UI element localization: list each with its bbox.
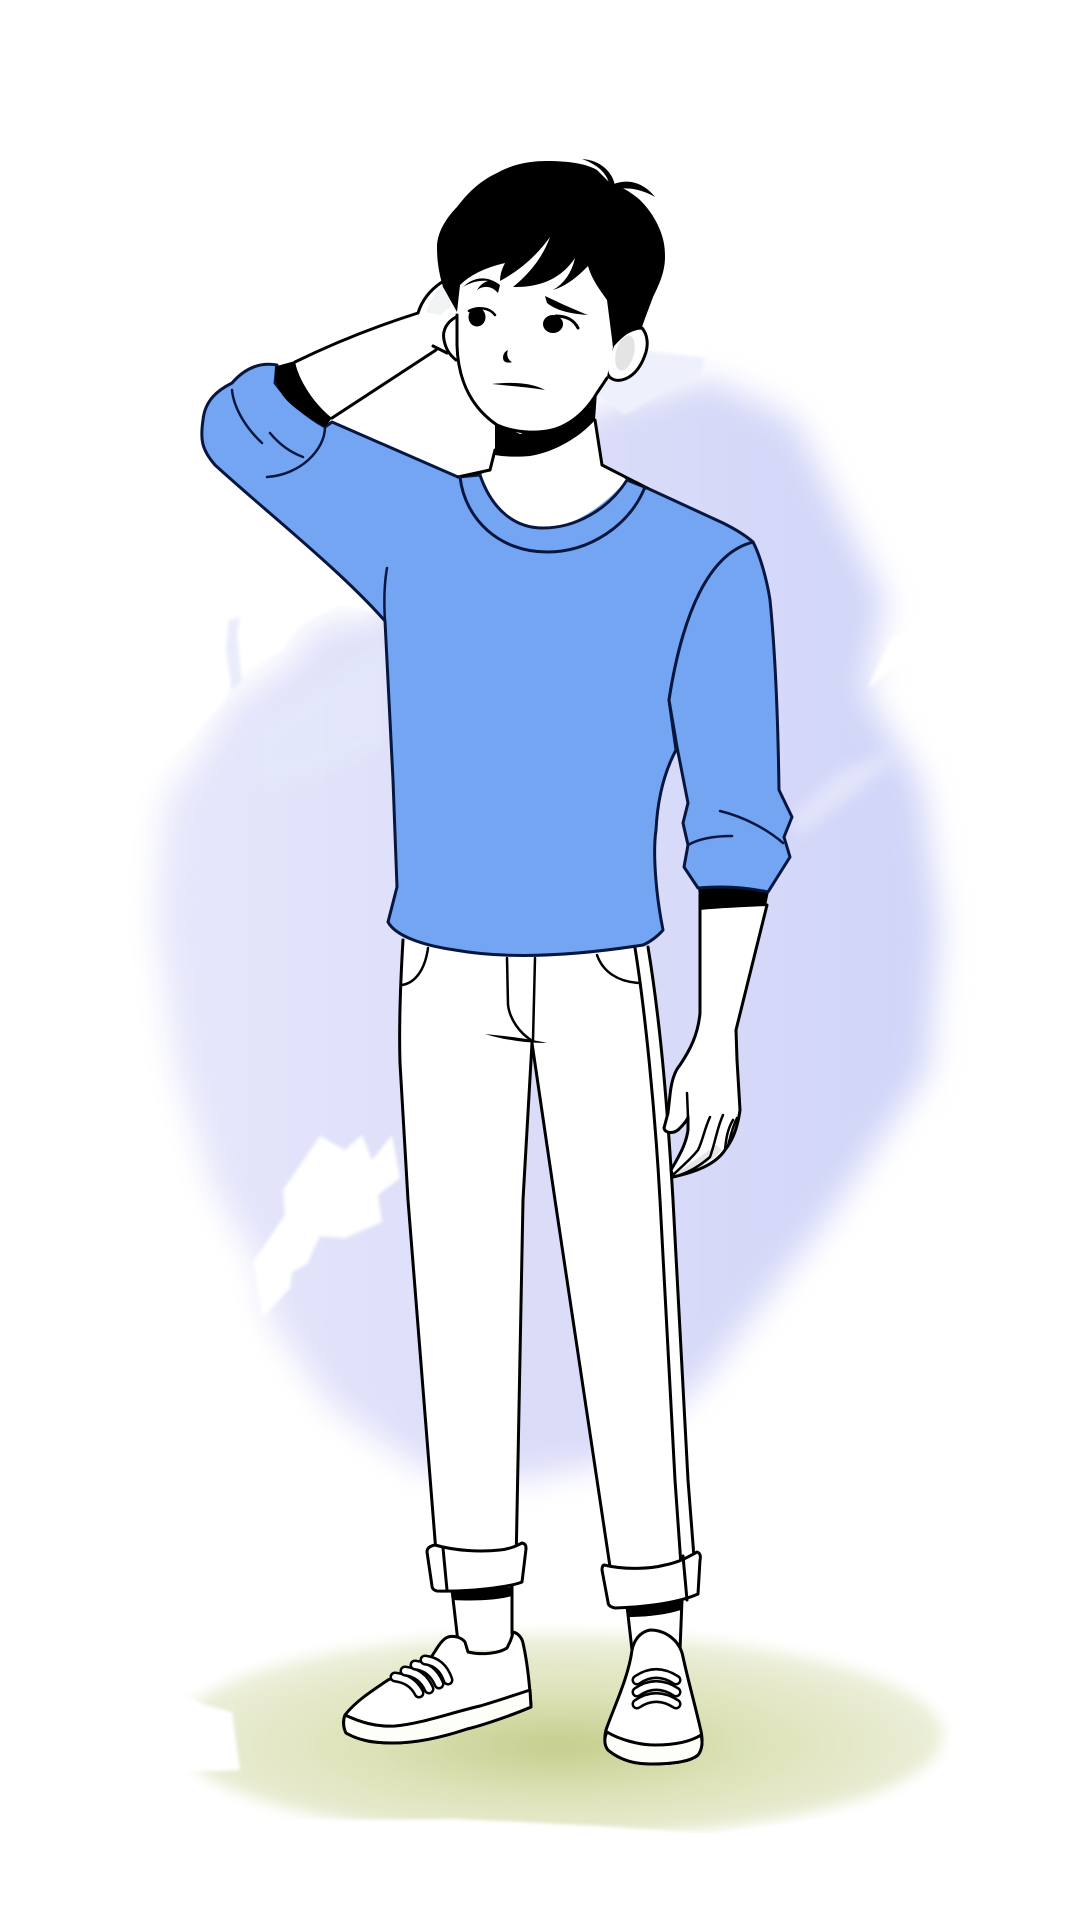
right shoe [605,1630,702,1764]
side stripe [635,948,681,1565]
left ear [444,317,456,360]
laces [395,1660,448,1693]
nose [503,350,512,363]
right sock [627,1600,682,1650]
right cuff [602,1552,700,1608]
shirt: body and raised sleeve [202,364,753,955]
background: lavender watercolor blob [120,350,960,1480]
right sleeve folds [688,811,783,845]
right ear [607,328,647,380]
left cuff [427,1543,526,1591]
face [457,250,613,432]
background: olive ground shadow [140,1633,980,1900]
collar [460,475,645,552]
raised arm and hand [295,282,460,418]
hair [437,159,665,347]
hanging forearm and hand [664,895,767,1177]
left trouser leg and right trouser leg [400,940,695,1580]
left shoe [344,1632,531,1743]
mouth [492,383,545,390]
crotch crease [485,1034,547,1043]
neck [458,410,647,528]
hair wisps [582,159,655,197]
figure: boy [202,159,792,1764]
laces [637,1674,676,1704]
black neck shadow [495,392,597,457]
black wrist band [698,886,769,910]
left sock [452,1586,512,1650]
eyes [468,308,578,333]
eyebrows [463,278,588,315]
pockets [402,948,640,985]
body side fold [384,568,387,621]
fly [507,958,535,1040]
raised sleeve folds [232,390,325,477]
black cuff band on raised arm [275,361,332,427]
shirt: right sleeve [669,542,792,892]
